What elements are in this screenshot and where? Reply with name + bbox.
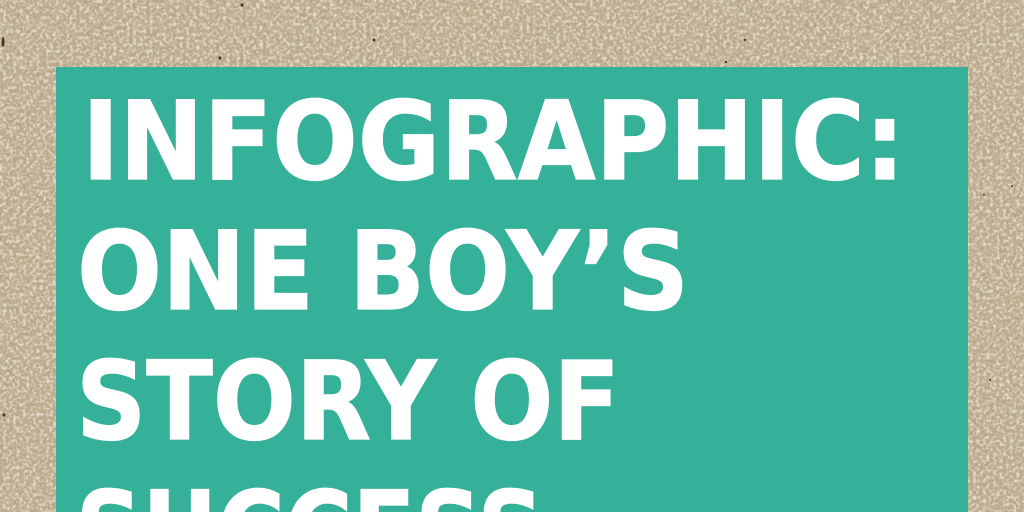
- title: four lines of white text: ONE BOY’S: [77, 208, 689, 335]
- title: four lines of white text: INFOGRAPHIC:: [82, 78, 905, 205]
- panel: teal title card: [56, 67, 968, 512]
- title: four lines of white text: STORY OF: [76, 338, 620, 465]
